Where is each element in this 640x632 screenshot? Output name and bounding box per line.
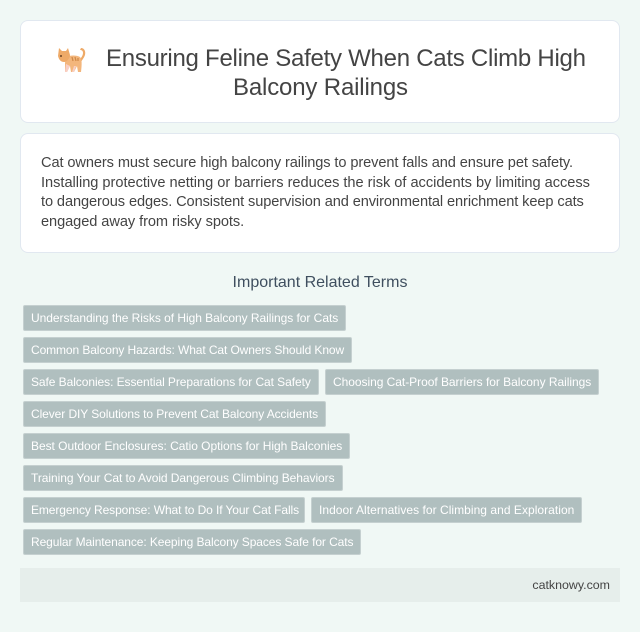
tag — [23, 337, 352, 363]
tag — [23, 497, 305, 523]
tag — [23, 465, 343, 491]
panel: related term tags — [23, 305, 599, 555]
tag: Training Your Cat to Avoid Dangerous Climbing Behaviors — [31, 471, 335, 485]
title: Balcony Railings — [233, 74, 408, 101]
title — [106, 45, 586, 101]
tag: Emergency Response: What to Do If Your Cat Falls — [31, 503, 299, 517]
summary text: to dangerous edges. Consistent supervision and environmental enrichment keep cats — [41, 194, 584, 210]
tag: Understanding the Risks of High Balcony Railings for Cats — [31, 311, 338, 325]
tag: Common Balcony Hazards: What Cat Owners Should Know — [31, 343, 344, 357]
summary text: Cat owners must secure high balcony railings to prevent falls and ensure pet safety. — [41, 155, 573, 171]
footer bar — [20, 568, 620, 602]
tag: Indoor Alternatives for Climbing and Exploration — [319, 503, 574, 517]
footer text: catknowy.com — [532, 578, 610, 592]
tag — [23, 369, 319, 395]
tag — [23, 401, 326, 427]
tag: Clever DIY Solutions to Prevent Cat Balcony Accidents — [31, 407, 318, 421]
tag — [325, 369, 599, 395]
summary text: Installing protective netting or barriers reduces the risk of accidents by limiting access — [41, 175, 590, 191]
tag — [23, 305, 346, 331]
summary text — [41, 155, 590, 230]
tag — [23, 433, 350, 459]
tag: Regular Maintenance: Keeping Balcony Spaces Safe for Cats — [31, 535, 353, 549]
tag: Best Outdoor Enclosures: Catio Options for High Balconies — [31, 439, 342, 453]
summary text: engaged away from risky spots. — [41, 214, 244, 230]
tag: Choosing Cat-Proof Barriers for Balcony Railings — [333, 375, 591, 389]
heading: related terms: Important Related Terms — [233, 274, 407, 291]
tag: Safe Balconies: Essential Preparations for Cat Safety — [31, 375, 311, 389]
panel: summary card — [20, 133, 620, 253]
tag — [311, 497, 582, 523]
panel: title card — [20, 20, 620, 123]
icon: cat — [58, 48, 86, 72]
tag — [23, 529, 361, 555]
title: Ensuring Feline Safety When Cats Climb High — [106, 45, 586, 72]
